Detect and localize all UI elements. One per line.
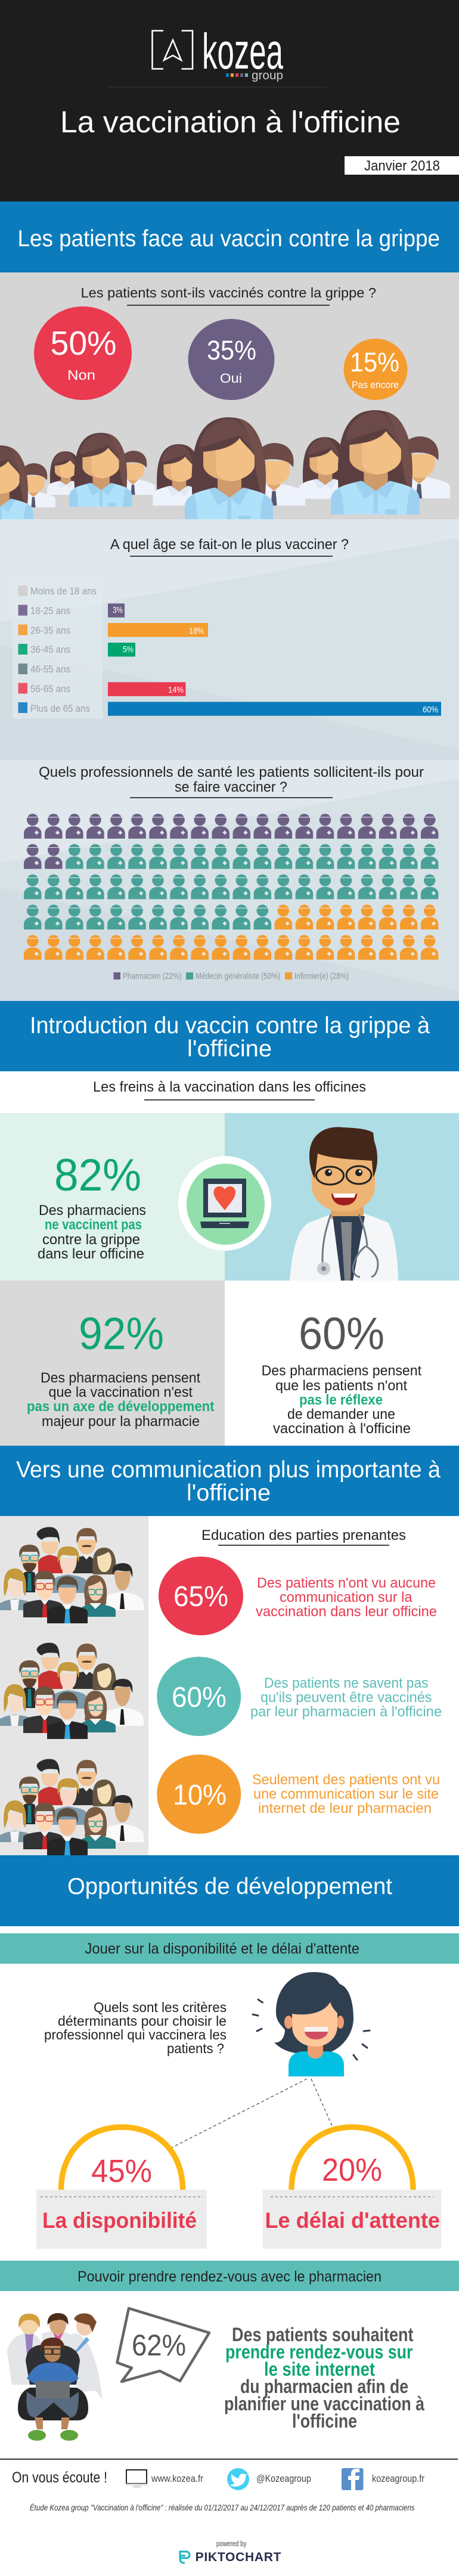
panel: 82% stat: Des pharmaciens: [39, 1202, 146, 1219]
section banner: patients: Les patients face au vaccin contre la grippe: [18, 226, 440, 252]
heading: education: Education des parties prenantes: [201, 1527, 406, 1543]
stat: 35% oui: Oui: [220, 371, 242, 386]
logo: Kozea group: kozea: [202, 23, 283, 79]
text: appointment statement: le site internet: [264, 2358, 375, 2380]
stat: 50% non: 50%: [50, 324, 117, 362]
icon: crowd 2: [0, 1642, 144, 1739]
sub-banner: disponibilité: Jouer sur la disponibilité et le délai d'attente: [85, 1940, 359, 1957]
text: appointment statement: prendre rendez-vous sur: [225, 2341, 413, 2363]
callout: 62% speech bubble: 62%: [132, 2329, 186, 2362]
stat: 15% pas encore: 15%: [350, 347, 399, 377]
panel: crowd column: [0, 1516, 148, 1855]
stat: 65%: 65%: [173, 1581, 228, 1613]
text: appointment statement: [224, 2324, 424, 2432]
heading: professionals: Quels professionnels de santé les patients sollicitent-ils pour: [39, 764, 424, 780]
dashed connectors: [171, 2079, 333, 2148]
text: appointment statement: l'officine: [292, 2410, 357, 2432]
logo: Kozea group: group: [252, 69, 283, 82]
stat: 20% délai d'attente: [263, 2127, 441, 2249]
bar chart: age: [108, 603, 441, 716]
panel: 60% stat: Des pharmaciens pensent: [262, 1363, 421, 1379]
panel: 82% stat: dans leur officine: [38, 1246, 144, 1262]
panel: 60% stat: vaccination à l'officine: [273, 1421, 411, 1437]
stat: 35% oui: [188, 319, 274, 400]
question text: déterminants pour choisir le: [58, 2013, 227, 2029]
icon: tablet with heart: [178, 1156, 271, 1251]
section banner: patients: [0, 202, 459, 272]
heading: freins: Les freins à la vaccination dans les officines: [93, 1079, 366, 1095]
illustration: patients crowd: [0, 410, 450, 524]
panel: 92% stat: 92%: [79, 1309, 164, 1359]
section banner: opportunités: Opportunités de développement: [67, 1874, 392, 1899]
panel: 92% stat: [0, 1281, 225, 1446]
footer: contacts: @Kozeagroup: [256, 2473, 311, 2484]
chart legend: age groups: 36-45 ans: [30, 644, 70, 655]
icon: smiling woman: [253, 1972, 370, 2076]
stat: 10%: une communication sur le site: [253, 1786, 439, 1802]
stat: 15% pas encore: Pas encore: [352, 379, 399, 390]
icon: crowd 3: [0, 1759, 144, 1855]
chart legend: age groups: Plus de 65 ans: [30, 703, 90, 714]
date badge: [345, 156, 459, 175]
icon: crowd 1: [0, 1527, 144, 1623]
stat: 20% délai d'attente: Le délai d'attente: [265, 2208, 440, 2233]
question text: Quels sont les critères: [94, 2000, 227, 2015]
stat: 10%: [157, 1754, 440, 1834]
panel: age chart: [0, 519, 459, 760]
sub-banner: rendez-vous: Pouvoir prendre rendez-vous avec le pharmacien: [77, 2268, 382, 2285]
icon: facebook: [342, 2468, 364, 2490]
stat: 10%: 10%: [173, 1780, 227, 1811]
panel: 92% stat: majeur pour la pharmacie: [42, 1413, 200, 1430]
stat: 65%: [159, 1557, 437, 1635]
stat: 45% disponibilité: 45%: [91, 2153, 152, 2189]
bar chart: age: 18%: [189, 626, 204, 636]
powered by Piktochart: PIKTOCHART: [196, 2550, 281, 2564]
stat: 10%: Seulement des patients ont vu: [252, 1772, 440, 1788]
bar chart: age: 60%: [423, 705, 438, 715]
section banner: introduction: [0, 1001, 459, 1071]
bar chart: age: 14%: [168, 685, 184, 695]
panel: 82% stat: 82%: [54, 1150, 141, 1201]
chart legend: age groups: 56-65 ans: [30, 683, 70, 695]
question text: [44, 2000, 227, 2056]
stat: 15% pas encore: [343, 339, 408, 400]
title: La vaccination à l'officine: [60, 105, 401, 139]
panel: 92% stat: pas un axe de développement: [27, 1399, 215, 1415]
panel: 60% stat: de demander une: [287, 1406, 395, 1422]
heading: professionals: [39, 764, 424, 798]
chart legend: age groups: 26-35 ans: [30, 625, 70, 636]
sub-banner: disponibilité: [0, 1933, 459, 1964]
panel: 92% stat: Des pharmaciens pensent: [41, 1370, 200, 1386]
footer: contacts: [12, 2468, 424, 2490]
section banner: communication: l'officine: [187, 1480, 271, 1506]
stat: 65%: Des patients n'ont vu aucune: [257, 1575, 436, 1591]
chart legend: age groups: 46-55 ans: [30, 664, 70, 675]
chart legend: professionals: Infirmier(e) (28%): [294, 971, 349, 981]
question text: professionnel qui vaccinera les: [44, 2027, 227, 2042]
powered by Piktochart: powered by: [216, 2540, 247, 2548]
text: appointment statement: planifier une vaccination à: [224, 2393, 424, 2414]
chart legend: age groups: [13, 579, 103, 718]
bar chart: age: 5%: [123, 644, 134, 655]
text: appointment statement: Des patients souhaitent: [232, 2324, 414, 2345]
bar chart: age: 3%: [113, 605, 123, 615]
stat: 50% non: [34, 306, 132, 400]
text: appointment statement: du pharmacien afin de: [240, 2376, 408, 2397]
chart legend: professionals: [113, 971, 349, 981]
panel: 92% stat: que la vaccination n'est: [49, 1384, 193, 1400]
heading: professionals: se faire vacciner ?: [175, 779, 287, 795]
panel: 60% stat: 60%: [299, 1309, 384, 1359]
footer: contacts: kozeagroup.fr: [372, 2473, 424, 2484]
pictogram chart: 100 health professionals: [24, 814, 438, 960]
chart legend: age groups: Moins de 18 ans: [30, 585, 97, 597]
stat: 60%: 60%: [172, 1682, 227, 1713]
stat: 35% oui: 35%: [207, 335, 256, 365]
stat: 65%: communication sur la: [280, 1589, 413, 1605]
panel: 60% stat: pas le réflexe: [299, 1392, 383, 1408]
stat: 20% délai d'attente: 20%: [322, 2152, 382, 2188]
panel: 82% stat: ne vaccinent pas: [45, 1217, 142, 1233]
section banner: communication: Vers une communication plus importante à: [16, 1457, 441, 1483]
panel: 82% stat: contre la grippe: [42, 1232, 140, 1248]
heading: age: A quel âge se fait-on le plus vacciner ?: [110, 537, 349, 553]
stat: 45% disponibilité: La disponibilité: [42, 2208, 197, 2233]
section banner: opportunités: [0, 1855, 459, 1926]
icon: doctors and patient: [7, 2313, 103, 2441]
panel: 82% stat: [0, 1113, 225, 1281]
stat: 10%: internet de leur pharmacien: [258, 1800, 432, 1816]
chart legend: professionals: Pharmacien (22%): [123, 971, 182, 981]
panel: professionals pictogram: [0, 760, 459, 1001]
icon: monitor: [126, 2470, 148, 2488]
chart legend: age groups: 18-25 ans: [30, 605, 70, 616]
logo: Kozea group: [153, 23, 283, 82]
sub-banner: rendez-vous: [0, 2261, 459, 2291]
section banner: communication: [0, 1446, 459, 1516]
stat: 60%: qu'ils peuvent être vaccinés: [260, 1690, 432, 1706]
chart legend: professionals: Médecin généraliste (50%): [196, 971, 280, 981]
header panel: [0, 0, 459, 202]
footer: contacts: On vous écoute !: [12, 2469, 107, 2486]
callout: 62% speech bubble: [117, 2308, 209, 2382]
question text: patients ?: [167, 2041, 224, 2056]
panel: vaccinated patients: [0, 272, 459, 524]
heading: vaccinated: Les patients sont-ils vaccinés contre la grippe ?: [81, 285, 376, 300]
panel: doctor illustration: [225, 1113, 459, 1281]
stat: 60%: par leur pharmacien à l'officine: [250, 1704, 442, 1720]
stat: 50% non: Non: [67, 367, 95, 383]
powered by Piktochart: [180, 2540, 281, 2564]
stat: 65%: vaccination dans leur officine: [256, 1604, 437, 1620]
stat: 60%: Des patients ne savent pas: [264, 1675, 429, 1691]
section banner: introduction: Introduction du vaccin contre la grippe à: [30, 1013, 430, 1039]
stat: 60%: [157, 1657, 442, 1736]
panel: 60% stat: [225, 1281, 459, 1446]
footer: contacts: www.kozea.fr: [151, 2473, 203, 2484]
icon: twitter: [227, 2468, 249, 2490]
date badge: Janvier 2018: [364, 158, 440, 174]
section banner: introduction: l'officine: [187, 1036, 272, 1062]
icon: doctor: [290, 1127, 398, 1281]
panel: 60% stat: que les patients n'ont: [275, 1378, 407, 1394]
stat: 45% disponibilité: [36, 2127, 207, 2249]
